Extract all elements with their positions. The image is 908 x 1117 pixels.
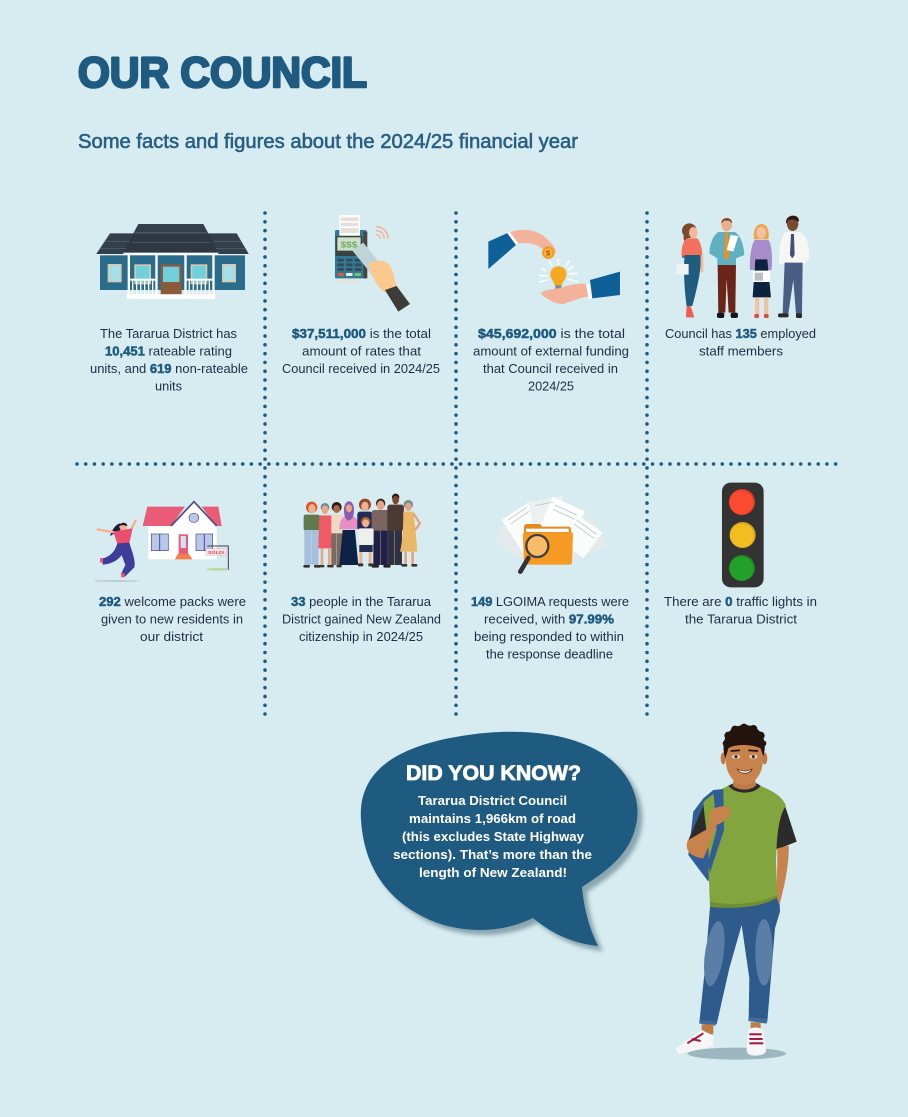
text: external funding: that Council received in	[483, 361, 618, 376]
woman in coral top	[677, 223, 703, 317]
text: rating units: units	[155, 378, 182, 394]
text: welcome packs: given to new residents in	[101, 612, 243, 626]
green t-shirt	[703, 786, 786, 907]
text: external funding: $45,692,000 is the total	[478, 326, 625, 341]
text: welcome packs: 292 welcome packs were	[99, 594, 246, 609]
icon: jumping woman and sold house: SOLD!	[208, 550, 225, 556]
text: LGOIMA requests: the response deadline	[486, 646, 613, 662]
icon: jumping woman and sold house	[93, 502, 230, 582]
text: traffic lights: There are 0 traffic lights in	[664, 594, 817, 609]
text: traffic lights: the Tararua District	[685, 612, 797, 626]
text: citizenship	[282, 594, 441, 644]
shoes	[702, 1024, 713, 1034]
title: OUR COUNCIL	[78, 49, 367, 97]
text: staff	[665, 326, 816, 358]
text: rating units: 10,451 rateable rating	[105, 344, 232, 358]
illustration: boy with backpack	[676, 724, 797, 1060]
panel: welcome packs	[93, 502, 246, 644]
text: LGOIMA requests: being responded to within	[474, 629, 624, 644]
text: rating units: The Tararua District has	[100, 326, 237, 341]
icon: four staff members	[677, 216, 809, 318]
woman in lilac top	[750, 224, 772, 318]
head	[721, 752, 726, 764]
text: citizenship: citizenship in 2024/25	[299, 629, 423, 644]
icon: traffic light	[722, 483, 764, 587]
callout heading: DID YOU KNOW?	[406, 762, 581, 785]
speech bubble shadow	[366, 737, 642, 951]
subtitle: Some facts and figures about the 2024/25 financial year	[78, 131, 578, 153]
sleeves and arms	[775, 806, 797, 850]
text: rates income	[282, 326, 440, 376]
icon: card payment terminal	[335, 215, 410, 312]
icon: group of new citizens	[303, 494, 420, 568]
text: LGOIMA requests: received, with 97.99%	[484, 612, 614, 626]
text: staff: staff members	[699, 344, 784, 358]
text: citizenship: 33 people in the Tararua	[291, 594, 432, 609]
icon: card payment terminal: $$$	[341, 240, 358, 250]
backpack strap and hand	[708, 789, 724, 872]
callout text: sections). That’s more than the	[393, 847, 592, 862]
text: rates income: amount of rates that	[302, 344, 421, 358]
man in teal shirt	[709, 218, 744, 318]
text: rating units: units, and 619 non-rateable	[90, 361, 248, 376]
panel: rates income	[282, 215, 440, 376]
callout: did you know speech bubble	[361, 732, 642, 951]
panel: traffic lights	[664, 483, 817, 626]
callout text: length of New Zealand!	[419, 865, 567, 880]
callout text	[393, 793, 592, 880]
text: staff: Council has 135 employed	[665, 326, 816, 341]
panel: staff	[665, 216, 816, 358]
text: citizenship: District gained New Zealand	[282, 612, 441, 626]
speech bubble	[361, 732, 638, 946]
text: LGOIMA requests: 149 LGOIMA requests were	[471, 594, 629, 609]
trousers	[699, 897, 780, 1024]
text: rates income: $37,511,000 is the total	[292, 326, 431, 341]
text: rates income: Council received in 2024/25	[282, 361, 440, 376]
icon: house	[96, 224, 249, 299]
man in white shirt	[778, 216, 809, 318]
callout text: (this excludes State Highway	[402, 829, 585, 844]
icon: hands with coin and light bulb	[488, 230, 620, 304]
text: external funding: 2024/25	[528, 378, 574, 394]
icon: folder, papers and magnifying glass	[495, 496, 607, 572]
callout text: Tararua District Council	[418, 793, 567, 808]
text: welcome packs: our district	[140, 629, 203, 644]
panel: LGOIMA requests	[471, 496, 629, 662]
text: traffic lights	[664, 594, 817, 626]
text: welcome packs	[99, 594, 246, 644]
icon: hands with coin and light bulb: $	[546, 248, 550, 257]
backpack	[688, 790, 723, 882]
text: rating units	[90, 326, 248, 394]
panel: rating units	[90, 224, 249, 394]
callout text: maintains 1,966km of road	[409, 811, 576, 826]
text: LGOIMA requests	[471, 594, 629, 662]
panel: external funding	[473, 230, 629, 394]
neck and collar	[728, 783, 761, 793]
text: external funding: amount of external funding	[473, 344, 629, 358]
text: external funding	[473, 326, 629, 394]
panel: citizenship	[282, 494, 441, 644]
